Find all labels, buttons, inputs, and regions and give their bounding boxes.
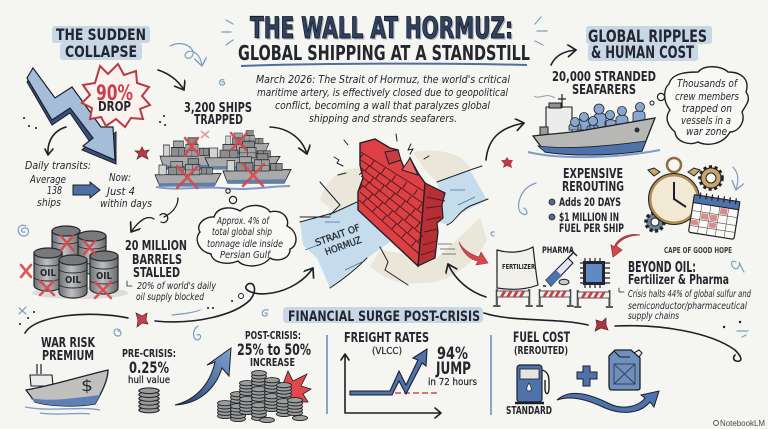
intro text: conflict, becoming a wall that paralyzes global — [275, 100, 490, 112]
post-crisis stats: POST-CRISIS: — [245, 330, 301, 342]
icon: fuel pump — [515, 365, 549, 403]
heading: global ripples — [586, 26, 712, 62]
label: pharma: PHARMA — [542, 246, 575, 256]
arrow: wavy fuel arrow — [557, 391, 659, 412]
star — [501, 157, 513, 168]
callout: now just 4: within days — [100, 198, 152, 210]
icon: falling arrow — [27, 68, 116, 164]
arrow: red arrow to fertilizer — [459, 242, 488, 265]
heading: fuel cost — [513, 330, 570, 357]
label: cape of good hope: CAPE OF GOOD HOPE — [664, 246, 732, 255]
stat: 94 percent jump: JUMP — [435, 359, 471, 378]
icon: 90 percent starburst — [82, 64, 150, 127]
list: rerouting costs: FUEL PER SHIP — [559, 221, 624, 235]
icon: burst behind coins — [273, 371, 311, 405]
post-crisis stats: INCREASE — [250, 357, 295, 369]
title: GLOBAL SHIPPING AT A STANDSTILL — [238, 41, 530, 65]
heading: the sudden collapse: COLLAPSE — [65, 42, 137, 61]
list: rerouting costs — [549, 195, 624, 235]
callout: daily transits: Daily transits: — [25, 160, 91, 172]
title: THE WALL AT HORMUZ: — [250, 11, 513, 45]
post-crisis stats: 25% to 50% — [237, 340, 311, 359]
icon: 90 percent starburst: 90% — [96, 81, 133, 105]
fuel cost — [506, 330, 659, 417]
map: strait of hormuz — [300, 134, 488, 288]
intro text — [256, 74, 510, 125]
chart axes — [341, 354, 441, 418]
icon: plus — [577, 366, 597, 386]
callout: daily transits — [25, 127, 91, 209]
heading: 20,000 stranded seafarers: SEAFARERS — [572, 82, 636, 98]
icon: microchip — [580, 258, 610, 288]
list: rerouting costs: $1 MILLION IN — [559, 210, 619, 224]
divider flourish left — [19, 268, 313, 333]
heading: war risk premium: PREMIUM — [42, 349, 94, 364]
heading: beyond oil — [628, 258, 729, 288]
heading: 20 million barrels: BARRELS — [132, 252, 182, 268]
text: crisis halts — [619, 288, 751, 322]
section separators — [327, 335, 491, 415]
icon: small coin stack — [139, 388, 159, 413]
heading: beyond oil: BEYOND OIL: — [628, 258, 696, 276]
watermark: notebooklm: NotebookLM — [720, 419, 765, 428]
divider flourish right — [484, 313, 748, 361]
stat: 94 percent jump: in 72 hours — [428, 377, 477, 388]
heading: the sudden collapse — [52, 25, 150, 61]
icon: 90 percent starburst: DROP — [98, 100, 131, 115]
text: 20 percent of supply — [127, 281, 217, 303]
text: 20 percent of supply: oil supply blocked — [136, 292, 204, 303]
label: strait of hormuz — [314, 223, 366, 260]
callout cloud: idle tonnage: Persian Gulf — [220, 250, 272, 261]
water — [300, 202, 390, 288]
heading: financial surge: FINANCIAL SURGE POST-CRISIS — [288, 309, 480, 325]
specks — [24, 116, 165, 128]
dashed baseline — [395, 392, 437, 394]
callout: now just 4: Now: — [109, 172, 131, 184]
text: crisis halts: semiconductor/pharmaceutical — [628, 301, 748, 312]
panel: barrels stalled — [21, 198, 217, 303]
arrow: to heading — [551, 50, 576, 65]
icon: oil barrels: OIL — [96, 271, 112, 282]
icon: oil barrels: OIL — [65, 275, 81, 286]
callout cloud: crew trapped: Thousands of — [677, 77, 738, 90]
heading: war risk premium — [41, 336, 96, 364]
icon: trapped ship cluster — [155, 131, 291, 189]
callout: now just 4 — [100, 172, 152, 210]
callout: daily transits: Average — [29, 174, 66, 186]
heading: fuel cost: (REROUTED) — [514, 344, 568, 357]
heading: 20 million barrels: 20 MILLION — [125, 238, 187, 254]
arrow: rising premium — [175, 348, 231, 405]
impact marks — [334, 134, 429, 175]
panel: beyond oil — [493, 246, 751, 322]
icon: oil barrels: OIL — [40, 268, 56, 279]
icon: jerry can — [609, 350, 642, 390]
heading: global ripples: & HUMAN COST — [591, 43, 695, 62]
title — [238, 11, 530, 66]
icon: gears clock and calendar — [646, 158, 740, 239]
callout cloud: crew trapped: trapped on — [682, 102, 732, 115]
panel: the sudden collapse — [25, 25, 152, 210]
pre-crisis stats: 0.25% — [129, 358, 169, 377]
callout cloud: crew trapped: vessels in a — [681, 114, 731, 127]
heading: global ripples: GLOBAL RIPPLES — [588, 27, 707, 46]
title: THE WALL AT HORMUZ: — [252, 12, 514, 46]
label: standard: STANDARD — [506, 404, 552, 417]
icon: oil barrels — [21, 226, 128, 299]
heading: 20,000 stranded seafarers — [552, 69, 656, 98]
pre-crisis stats: hull value — [128, 375, 170, 386]
arrow: wall to seafarers — [486, 123, 524, 160]
stat: 94 percent jump: 94% — [437, 344, 468, 363]
freight rates chart — [341, 331, 477, 418]
heading: 3,200 ships trapped: TRAPPED — [194, 113, 243, 128]
heading: war risk premium: WAR RISK — [41, 336, 96, 351]
decorative swirls and ticks — [18, 17, 744, 340]
arrow: ships to wall — [270, 127, 307, 154]
callout cloud: idle tonnage — [197, 189, 296, 266]
icon: insured ship: $ — [81, 376, 93, 395]
heading: expensive rerouting: REROUTING — [562, 179, 624, 195]
icon: red brick wall — [358, 139, 456, 266]
text: 20 percent of supply: 20% of world's daily — [137, 281, 217, 292]
icon: fertilizer bag — [497, 247, 538, 289]
heading: 20,000 stranded seafarers: 20,000 STRANDED — [552, 69, 656, 85]
callout: daily transits: ships — [37, 197, 61, 209]
arrow: red arrow to supply chain — [611, 235, 640, 257]
land — [320, 151, 487, 283]
intro text: maritime artery, is effectively closed due to geopolitical — [257, 87, 508, 99]
panel: global ripples and human cost — [528, 26, 748, 157]
callout cloud: crew trapped: war zone — [686, 125, 727, 138]
seafarers — [569, 102, 645, 130]
icon: fertilizer bag: FERTILIZER — [502, 263, 535, 271]
war risk premium — [25, 336, 108, 414]
label: strait of hormuz: STRAIT OF — [314, 223, 362, 249]
heading: 20 million barrels — [125, 238, 187, 281]
star — [135, 147, 149, 159]
icon: large coin pile — [218, 371, 308, 423]
panel: financial surge post-crisis — [25, 307, 659, 423]
icon: ship with seafarers — [528, 94, 660, 157]
heading: 3,200 ships trapped: 3,200 SHIPS — [184, 101, 252, 116]
label: strait of hormuz: HORMUZ — [324, 235, 363, 258]
arrow: transits to now — [73, 182, 100, 198]
post-crisis stats — [237, 330, 311, 369]
pre-crisis stats: PRE-CRISIS: — [122, 348, 176, 360]
intro text: March 2026: The Strait of Hormuz, the world's critical — [256, 74, 510, 86]
heading: beyond oil: Fertilizer & Pharma — [628, 272, 729, 288]
icon: road barriers — [493, 289, 613, 307]
chart line arrow — [350, 349, 427, 395]
callout cloud: crew trapped: crew members — [675, 90, 739, 103]
pre-crisis stats — [122, 348, 176, 386]
icon: syringe and pill — [543, 250, 577, 286]
arrow: collapse to ships — [158, 70, 184, 90]
callout cloud: idle tonnage: total global ship — [212, 227, 272, 238]
heading: 20 million barrels: STALLED — [133, 265, 180, 281]
loop decoration — [160, 198, 178, 223]
panel: ships trapped — [155, 101, 291, 189]
heading: expensive rerouting: EXPENSIVE — [563, 166, 623, 182]
intro text: shipping and strands seafarers. — [309, 113, 457, 125]
callout cloud: crew trapped — [650, 67, 748, 144]
callout cloud: idle tonnage: tonnage idle inside — [207, 239, 283, 250]
text: crisis halts: supply chains — [628, 311, 679, 322]
stat: 94 percent jump — [428, 344, 477, 388]
heading: fuel cost: FUEL COST — [513, 330, 570, 346]
heading: the sudden collapse: THE SUDDEN — [56, 25, 146, 44]
arrow: curved to wall — [448, 264, 486, 297]
callout: now just 4: Just 4 — [105, 186, 135, 198]
list: rerouting costs: Adds 20 DAYS — [559, 195, 621, 209]
heading: freight rates — [344, 331, 429, 357]
heading: freight rates: FREIGHT RATES — [344, 331, 429, 346]
heading: freight rates: (VLCC) — [372, 346, 402, 357]
heading: expensive rerouting — [562, 166, 624, 195]
callout cloud: idle tonnage: Approx. 4% of — [216, 216, 271, 227]
panel: expensive rerouting — [549, 158, 740, 257]
callout: daily transits: 138 — [47, 185, 62, 197]
arrow: loop to barrels — [131, 218, 154, 232]
heading: 3,200 ships trapped — [184, 101, 252, 128]
